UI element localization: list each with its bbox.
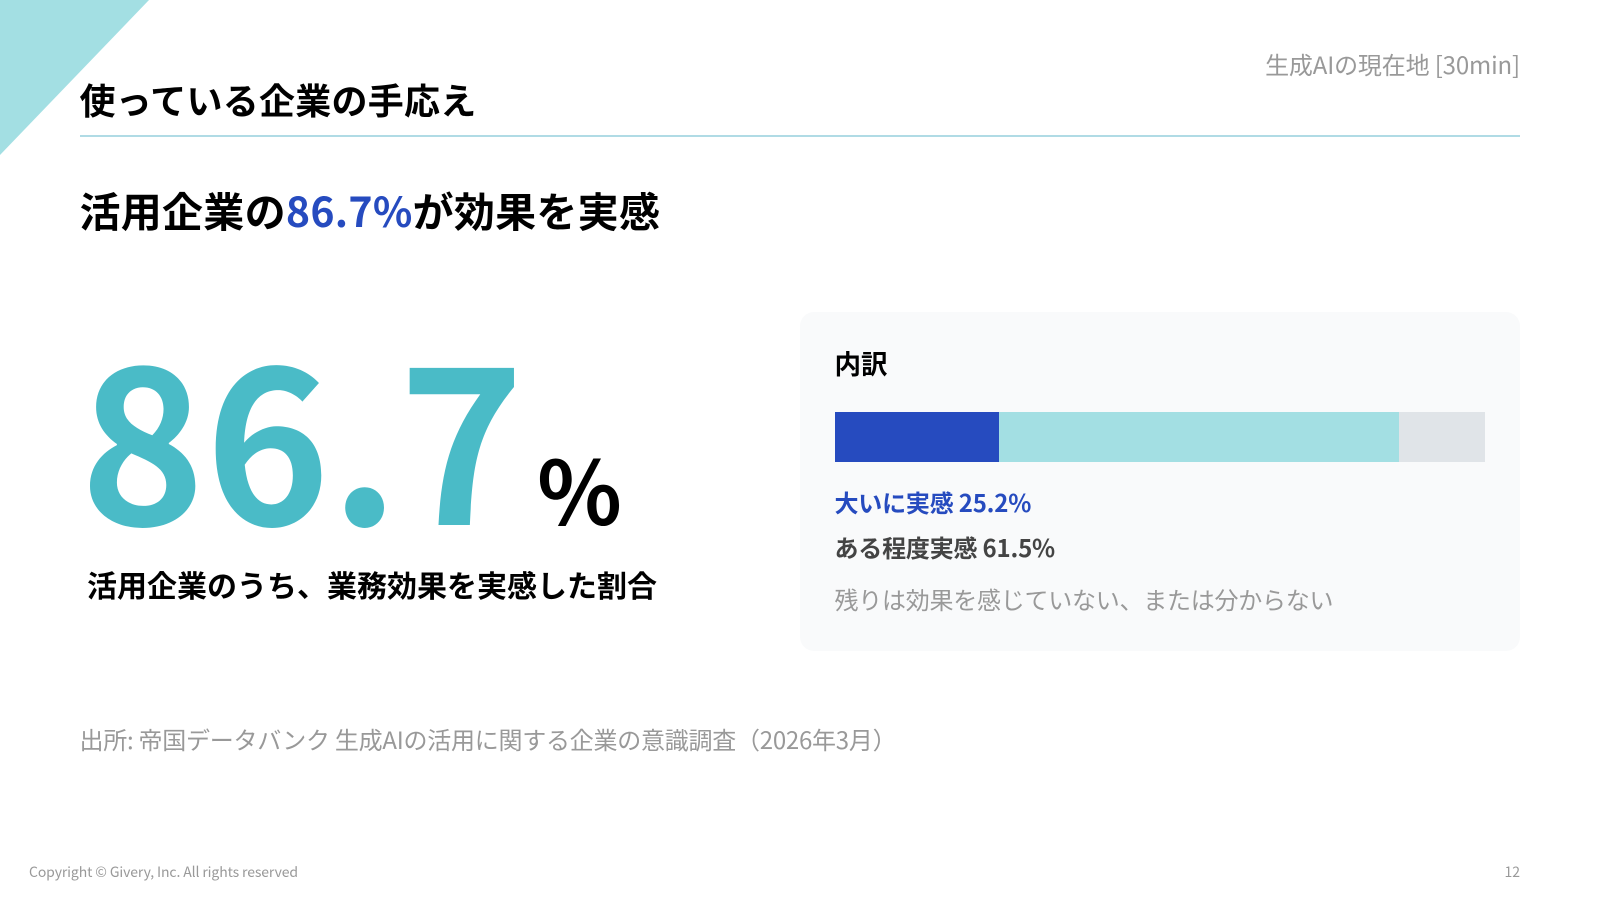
big stat: 86.7% — [80, 280, 622, 586]
segment: strongly felt 25.2% — [835, 412, 999, 462]
source note: 出所: 帝国データバンク 生成AIの活用に関する企業の意識調査（2026年3月） — [80, 721, 896, 756]
segment: remainder — [1399, 412, 1485, 462]
segment: somewhat felt 61.5% — [999, 412, 1399, 462]
stacked bar — [835, 412, 1485, 462]
legend: remainder: 残りは効果を感じていない、または分からない — [834, 581, 1333, 616]
header rule — [80, 135, 1520, 137]
stat caption: 活用企業のうち、業務効果を実感した割合 — [87, 562, 657, 606]
panel: breakdown — [800, 312, 1520, 651]
copyright: Copyright © Givery, Inc. All rights reserved — [29, 862, 298, 882]
section label: 生成AIの現在地 [30min] — [1265, 46, 1520, 81]
page number: 12 — [1504, 862, 1520, 882]
title: 使っている企業の手応え — [80, 73, 476, 125]
headline: 活用企業の86.7%が効果を実感 — [80, 178, 660, 238]
legend: somewhat felt: ある程度実感 61.5% — [834, 529, 1055, 564]
corner triangle — [0, 0, 149, 155]
panel heading: 内訳 — [834, 343, 888, 382]
legend: strongly felt: 大いに実感 25.2% — [834, 484, 1031, 519]
